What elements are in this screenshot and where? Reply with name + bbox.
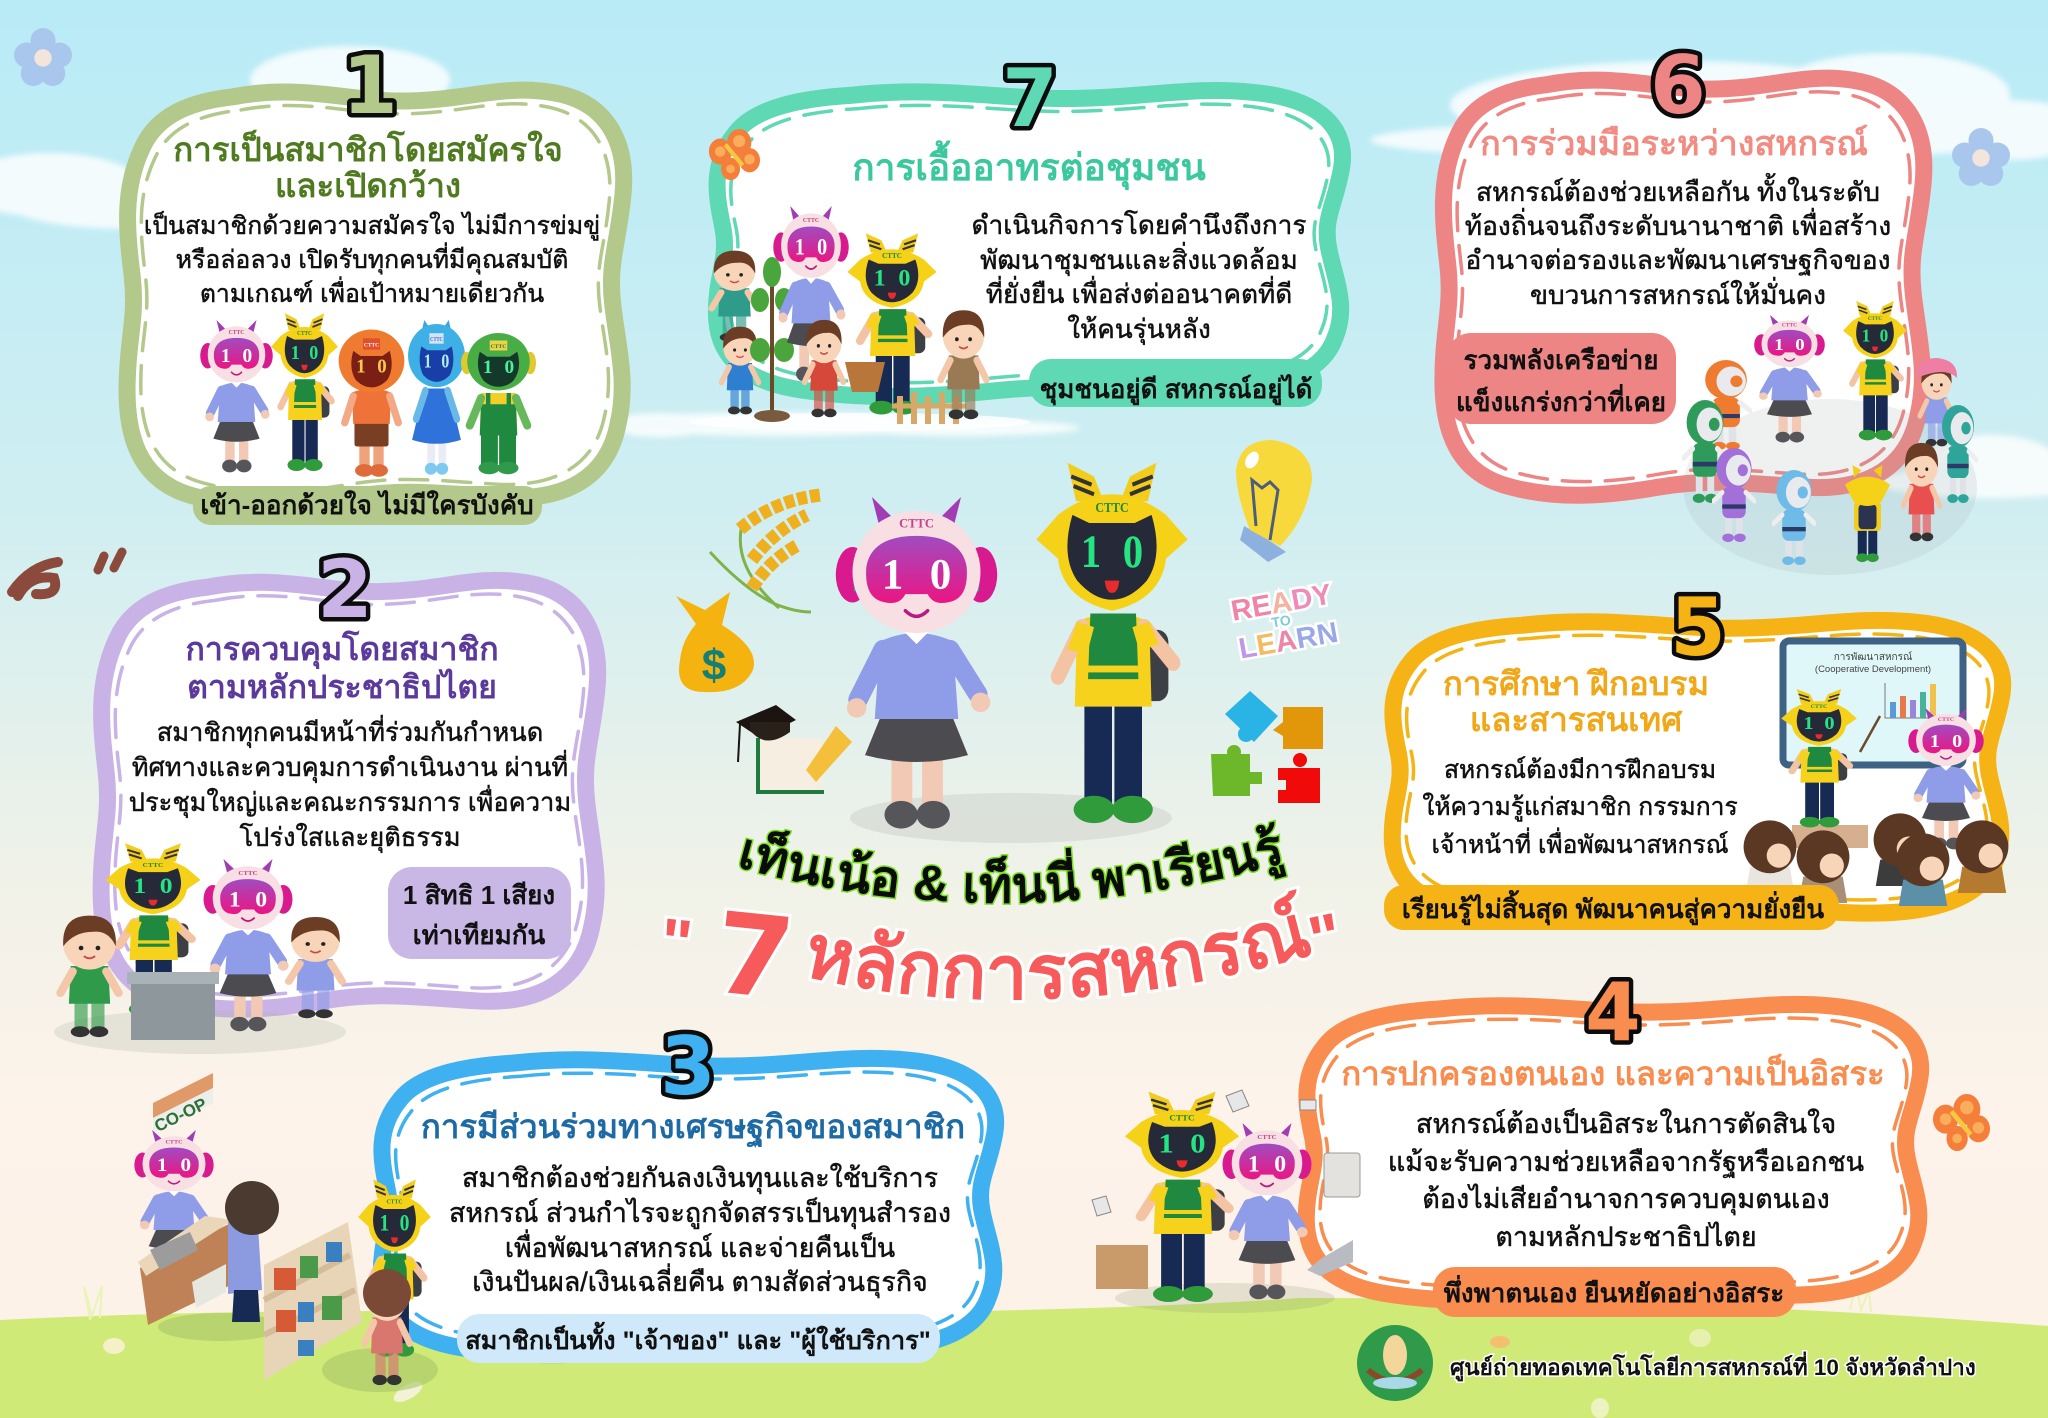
slogan pill: แข็งแกร่งกว่าที่เคย [1456, 383, 1666, 417]
slogan pill [457, 1314, 940, 1363]
grass ground [0, 1298, 2048, 1418]
flower icon right [1952, 128, 2010, 186]
icon: puzzle pieces [1211, 691, 1323, 803]
slogan pill [1029, 359, 1322, 407]
number 3: 3 [660, 1020, 716, 1113]
panel 6: cooperation among cooperatives [1443, 39, 1977, 575]
title line 2: " [657, 904, 696, 981]
illustration: community planting [690, 206, 1030, 431]
icon: ready to learn sticker: TO [1270, 612, 1292, 631]
heading: และสารสนเทศ [1470, 701, 1683, 738]
title line 2: " [1302, 898, 1348, 977]
icon: ready to learn sticker: LEARN [1236, 617, 1340, 666]
body text: เงินปันผล/เงินเฉลี่ยคืน ตามสัดส่วนธุรกิจ [472, 1263, 928, 1298]
icon: ready to learn sticker: READY [1229, 579, 1334, 628]
body text: สมาชิกต้องช่วยกันลงเงินทุนและใช้บริการ [462, 1162, 938, 1194]
body text: เพื่อพัฒนาสหกรณ์ และจ่ายคืนเป็น [505, 1229, 895, 1263]
flower icon top left [14, 28, 72, 86]
illustration: co-op shop [134, 1073, 438, 1392]
slogan pill: รวมพลังเครือข่าย [1464, 345, 1658, 375]
body text: ทิศทางและควบคุมการดำเนินงาน ผ่านที่ [132, 750, 568, 783]
title line 2: 7 [708, 888, 800, 1026]
body text: ขบวนการสหกรณ์ให้มั่นคง [1530, 277, 1826, 310]
body text: ตามหลักประชาธิปไตย [1495, 1222, 1757, 1252]
panel 4: autonomy and independence [1092, 966, 1921, 1317]
footer logo [1357, 1325, 1433, 1401]
illustration: classroom [1744, 641, 2008, 906]
panel 2: democratic member control [54, 543, 598, 1054]
illustration: co-op shop: CO-OP [151, 1094, 210, 1136]
slogan pill: 1 สิทธิ 1 เสียง [403, 880, 555, 910]
slogan pill [1447, 333, 1676, 424]
body text: ประชุมใหญ่และคณะกรรมการ เพื่อความ [129, 785, 571, 818]
number 4: 4 [1585, 966, 1641, 1059]
body text: แม้จะรับความช่วยเหลือจากรัฐหรือเอกชน [1388, 1147, 1864, 1178]
panel 7: concern for community [690, 52, 1343, 431]
body text: สหกรณ์ต้องเป็นอิสระในการตัดสินใจ [1416, 1106, 1836, 1139]
slogan pill: พึ่งพาตนเอง ยืนหยัดอย่างอิสระ [1444, 1274, 1784, 1308]
butterfly right [1933, 1094, 1990, 1151]
body text: พัฒนาชุมชนและสิ่งแวดล้อม [980, 242, 1298, 276]
icon: graduation book [736, 705, 852, 792]
slogan pill: สมาชิกเป็นทั้ง "เจ้าของ" และ "ผู้ใช้บริการ" [465, 1321, 931, 1357]
body text: ต้องไม่เสียอำนาจการควบคุมตนเอง [1422, 1184, 1830, 1216]
footer organisation name: ศูนย์ถ่ายทอดเทคโนโลยีการสหกรณ์ที่ 10 จังหวัดลำปาง [1450, 1351, 1976, 1382]
body text: ที่ยั่งยืน เพื่อส่งต่ออนาคตที่ดี [986, 276, 1292, 309]
panel 3: economic participation [134, 1020, 996, 1392]
title line 2 [657, 886, 1348, 1026]
panel 5: education training and information [1384, 581, 2008, 930]
heading: การควบคุมโดยสมาชิก [185, 630, 499, 670]
number 5: 5 [1670, 581, 1726, 674]
icon: money bag [676, 592, 754, 692]
number 6: 6 [1650, 39, 1706, 132]
title line 1: เท็นเน้อ & เท็นนี่ พาเรียนรู้ [738, 820, 1288, 905]
illustration: classroom: การพัฒนาสหกรณ์ [1834, 651, 1912, 663]
central illustration: two mascots [836, 463, 1188, 843]
icon: money bag: $ [702, 641, 726, 690]
butterfly left [709, 129, 760, 180]
heading: การมีส่วนร่วมทางเศรษฐกิจของสมาชิก [421, 1108, 965, 1148]
number 2: 2 [317, 543, 373, 636]
heading: การเป็นสมาชิกโดยสมัครใจ [173, 129, 563, 168]
body text: ตามเกณฑ์ เพื่อเป้าหมายเดียวกัน [200, 276, 544, 308]
icon: rice [710, 495, 821, 612]
slogan pill [388, 867, 571, 959]
heading: การเอื้ออาทรต่อชุมชน [852, 140, 1206, 191]
illustration: circle of characters [1683, 301, 1977, 575]
icon: ready to learn sticker [1229, 579, 1340, 666]
heading: การศึกษา ฝึกอบรม [1443, 665, 1709, 702]
heading: การร่วมมือระหว่างสหกรณ์ [1480, 124, 1868, 163]
slogan pill: เท่าเทียมกัน [413, 920, 545, 950]
icon: light bulb [1236, 440, 1312, 562]
body text: เจ้าหน้าที่ เพื่อพัฒนาสหกรณ์ [1431, 827, 1729, 859]
body text: เป็นสมาชิกด้วยความสมัครใจ ไม่มีการข่มขู่ [144, 210, 600, 241]
slogan pill: ชุมชนอยู่ดี สหกรณ์อยู่ได้ [1040, 373, 1312, 406]
body text: โปร่งใสและยุติธรรม [239, 823, 461, 853]
heading: และเปิดกว้าง [275, 167, 461, 204]
body text: อำนาจต่อรองและพัฒนาเศรษฐกิจของ [1466, 245, 1890, 276]
body text: ให้คนรุ่นหลัง [1067, 314, 1211, 345]
slogan pill: เข้า-ออกด้วยใจ ไม่มีใครบังคับ [200, 489, 534, 520]
slogan pill [1433, 1267, 1796, 1317]
body text: สมาชิกทุกคนมีหน้าที่ร่วมกันกำหนด [157, 715, 543, 748]
illustration: classroom: (Cooperative Development) [1815, 664, 1931, 675]
number 1: 1 [342, 39, 398, 132]
slogan pill: เรียนรู้ไม่สิ้นสุด พัฒนาคนสู่ความยั่งยืน [1402, 889, 1824, 926]
body text: สหกรณ์ต้องช่วยเหลือกัน ทั้งในระดับ [1476, 173, 1880, 207]
body text: หรือล่อลวง เปิดรับทุกคนที่มีคุณสมบัติ [176, 242, 568, 275]
illustration: voting [54, 843, 346, 1054]
body text: สหกรณ์ ส่วนกำไรจะถูกจัดสรรเป็นทุนสำรอง [449, 1196, 951, 1229]
grass highlights [84, 1284, 1871, 1418]
title line 2: หลักการสหกรณ์ [807, 886, 1314, 1003]
characters row [200, 313, 536, 477]
heading: การปกครองตนเอง และความเป็นอิสระ [1341, 1053, 1885, 1092]
number 7: 7 [1002, 52, 1058, 145]
clouds [0, 46, 2048, 498]
illustration: independent characters [1092, 1090, 1360, 1313]
slogan pill [1384, 885, 1839, 930]
body text: ท้องถิ่นจนถึงระดับนานาชาติ เพื่อสร้าง [1465, 208, 1891, 241]
heading: ตามหลักประชาธิปไตย [187, 668, 497, 705]
body text: ให้ความรู้แก่สมาชิก กรรมการ [1422, 793, 1738, 822]
body text: ดำเนินกิจการโดยคำนึงถึงการ [972, 210, 1306, 240]
doodle mark [12, 552, 122, 596]
panel 1: voluntary and open membership [127, 39, 624, 525]
body text: สหกรณ์ต้องมีการฝึกอบรม [1444, 756, 1716, 784]
